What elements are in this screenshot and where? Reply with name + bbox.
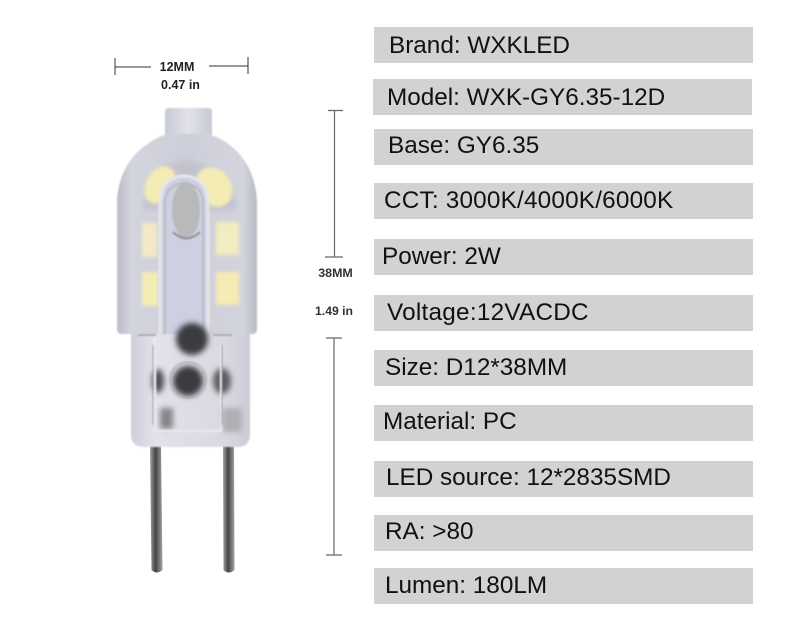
dark components xyxy=(152,323,242,432)
spec row: brand xyxy=(374,27,753,63)
spec row: material: Material: PC xyxy=(383,408,517,435)
spec row: size: Size: D12*38MM xyxy=(385,354,567,381)
bulb top nub xyxy=(165,108,212,136)
spec row: material xyxy=(374,405,753,441)
inner U-shaped wire frame xyxy=(138,176,232,335)
width dimension: 12MM / 0.47 in: 0.47 in xyxy=(161,78,200,92)
spec row: power xyxy=(374,239,753,275)
spec row: LED source: LED source: 12*2835SMD xyxy=(386,464,671,491)
LED bulb illustration xyxy=(117,108,257,572)
spec row: LED source xyxy=(374,461,753,497)
spec row: RA: RA: >80 xyxy=(385,518,473,545)
height dimension: 38MM / 1.49 in: 1.49 in xyxy=(315,304,353,318)
lower base xyxy=(131,330,250,447)
spec row: voltage: Voltage:12VACDC xyxy=(387,299,589,326)
pins xyxy=(150,446,234,572)
spec row: base: Base: GY6.35 xyxy=(388,132,539,159)
spec row: size xyxy=(374,350,753,386)
spec row: lumen xyxy=(374,568,753,604)
spec row: lumen: Lumen: 180LM xyxy=(385,572,547,599)
spec row: power: Power: 2W xyxy=(382,243,501,270)
shaded inner dome xyxy=(143,160,238,210)
height dimension: 38MM / 1.49 in xyxy=(315,110,353,555)
LED chips xyxy=(138,160,240,306)
width dimension: 12MM / 0.47 in xyxy=(115,57,248,92)
upper body xyxy=(117,134,257,334)
spec row: voltage xyxy=(374,295,753,331)
width dimension: 12MM / 0.47 in: 12MM xyxy=(160,60,194,74)
spec row: model: Model: WXK-GY6.35-12D xyxy=(387,84,665,111)
height dimension: 38MM / 1.49 in: 38MM xyxy=(318,266,353,280)
spec row: model xyxy=(373,79,752,115)
spec row: brand: Brand: WXKLED xyxy=(389,32,570,59)
base frame xyxy=(153,337,222,431)
spec row: RA xyxy=(374,515,753,551)
product photo and dimension drawing xyxy=(114,57,353,572)
spec row: CCT xyxy=(374,183,753,219)
spec row: CCT: CCT: 3000K/4000K/6000K xyxy=(384,187,673,214)
spec row: base xyxy=(374,129,753,165)
